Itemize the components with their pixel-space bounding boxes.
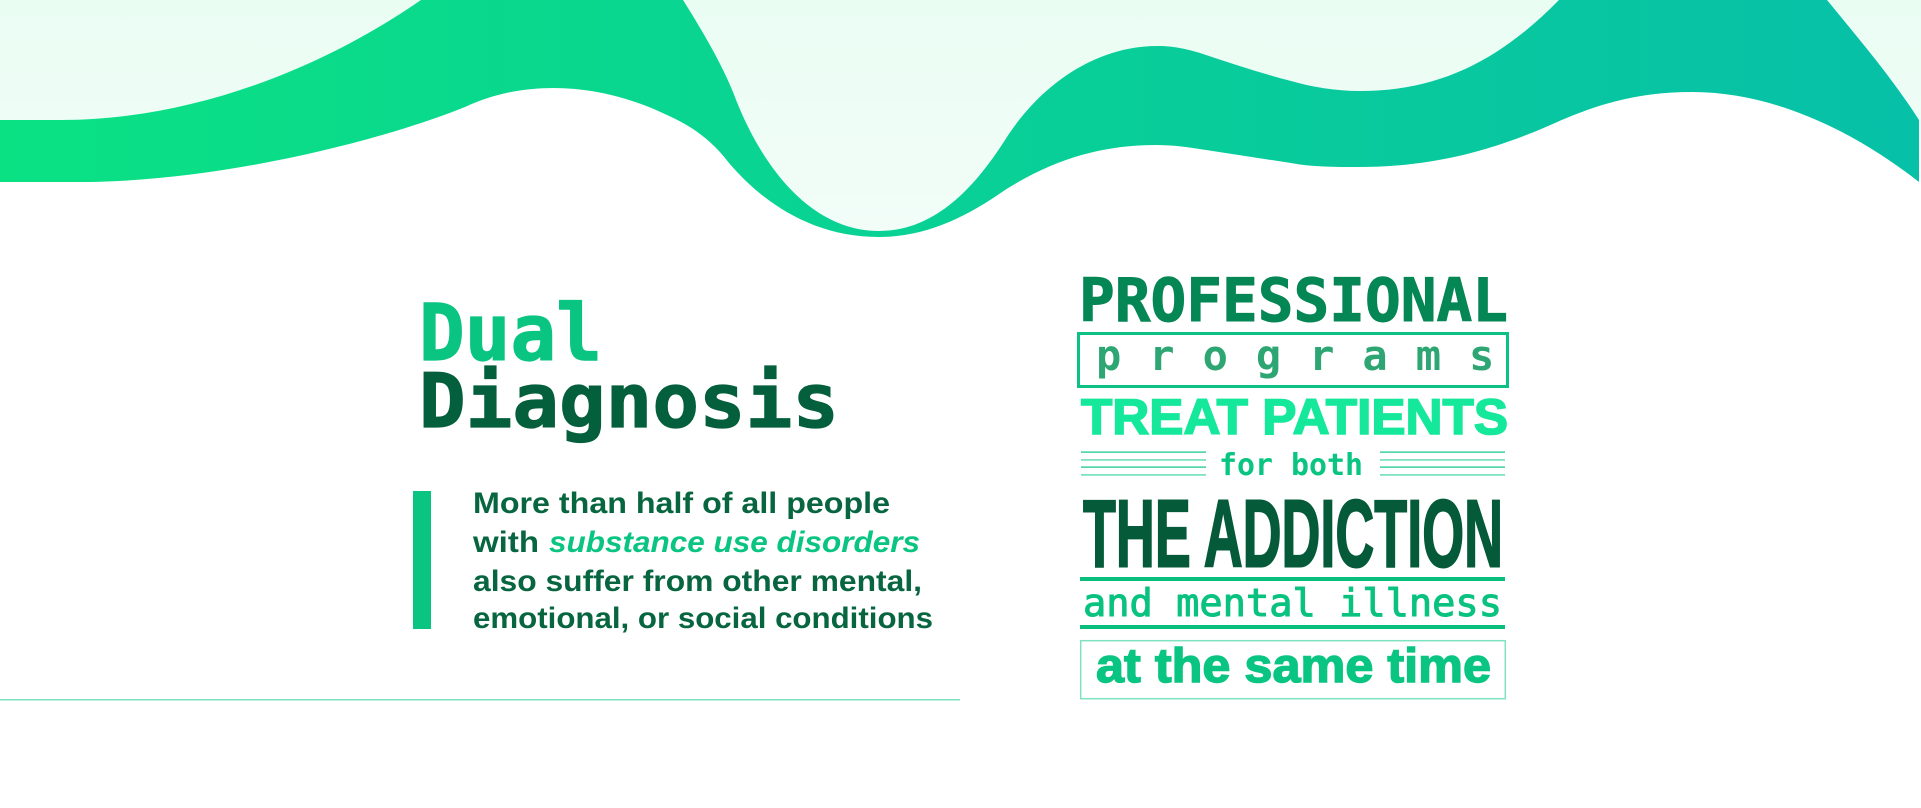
title: Dual Diagnosis [419,289,839,445]
bottom divider line [0,699,960,700]
header wave [0,0,1921,237]
description paragraph: emotional, or social conditions [473,602,933,635]
description paragraph: also suffer from other mental, [473,565,922,598]
heading: THE ADDICTION: THE ADDICTION [1083,480,1503,588]
green wave band [0,0,1919,237]
text: and mental illness: and mental illness [1083,581,1502,626]
for both with side rules: for both [1219,448,1363,483]
description paragraph [472,487,933,635]
heading: TREAT PATIENTS: TREAT PATIENTS [1081,389,1508,445]
title line: Diagnosis: Diagnosis [419,357,839,445]
box: programs: programs [1096,331,1522,380]
box: at the same time: at the same time [1096,640,1491,693]
rule below mental illness [1080,625,1505,629]
heading: PROFESSIONAL: PROFESSIONAL [1079,266,1508,336]
highlighted phrase: substance use disorders [549,526,920,559]
rule above mental illness [1080,577,1505,581]
description paragraph: More than half of all people [473,487,890,520]
accent bar [413,491,431,629]
title line: Dual: Dual [419,289,602,379]
pale wave background [0,0,1921,237]
typographic statement block [1078,266,1522,699]
description paragraph: with [472,526,539,559]
